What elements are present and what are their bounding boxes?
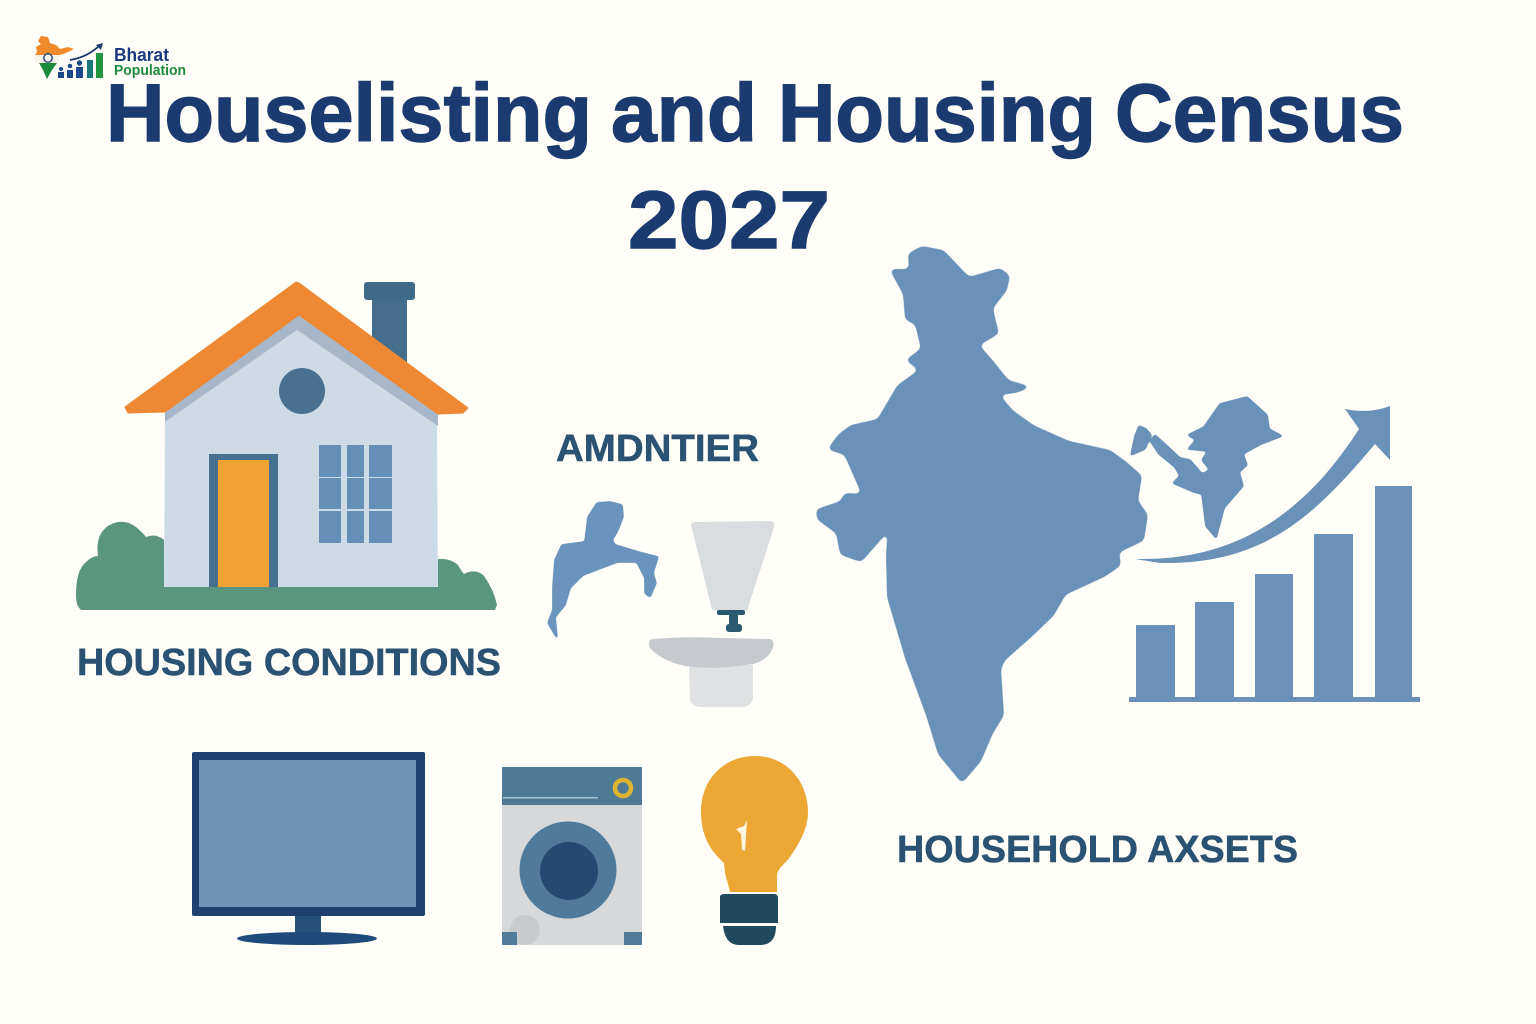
title: 2027 bbox=[628, 175, 830, 266]
tank bbox=[691, 521, 774, 611]
logo wordmark bbox=[114, 45, 186, 79]
window bbox=[319, 445, 392, 543]
title: Census bbox=[1115, 68, 1404, 159]
bar chart bbox=[1129, 486, 1420, 702]
icon: washing machine bbox=[502, 767, 642, 945]
icon: toilet bbox=[649, 521, 774, 707]
logo wordmark: Bharat bbox=[114, 45, 169, 65]
chimney bbox=[364, 282, 415, 362]
bushes and ground bbox=[76, 522, 497, 610]
control knob bbox=[615, 780, 631, 796]
label: household assets: HOUSEHOLD AXSETS bbox=[897, 829, 1298, 871]
logo wordmark: Population bbox=[114, 63, 186, 79]
roof bbox=[125, 282, 468, 414]
label: housing conditions: HOUSING CONDITIONS bbox=[77, 642, 501, 684]
title: and bbox=[611, 68, 757, 159]
round attic window bbox=[279, 368, 325, 414]
door bbox=[209, 454, 278, 587]
icon: small map right bbox=[1131, 397, 1282, 538]
connector bbox=[717, 610, 745, 632]
label: amenities: AMDNTIER bbox=[556, 428, 759, 470]
pedestal bbox=[689, 665, 753, 707]
drum bbox=[520, 822, 616, 918]
logo icon: people and bars bbox=[58, 53, 103, 78]
logo icon: tricolour map bbox=[33, 36, 74, 79]
icon: growth arrow bbox=[1135, 406, 1390, 563]
logo: Bharat Population bbox=[33, 36, 186, 79]
icon: house bbox=[76, 282, 497, 610]
fascia bbox=[165, 315, 438, 426]
title: Housing bbox=[778, 68, 1096, 159]
wall bbox=[164, 330, 438, 587]
icon: television bbox=[192, 752, 425, 945]
title bbox=[106, 68, 1404, 266]
bowl bbox=[649, 637, 774, 668]
icon: light bulb bbox=[701, 756, 808, 945]
icon: small map fragment bbox=[548, 502, 658, 638]
icon: India map bbox=[817, 247, 1147, 782]
title: Houselisting bbox=[106, 68, 592, 159]
logo icon: arrow bbox=[70, 43, 103, 60]
